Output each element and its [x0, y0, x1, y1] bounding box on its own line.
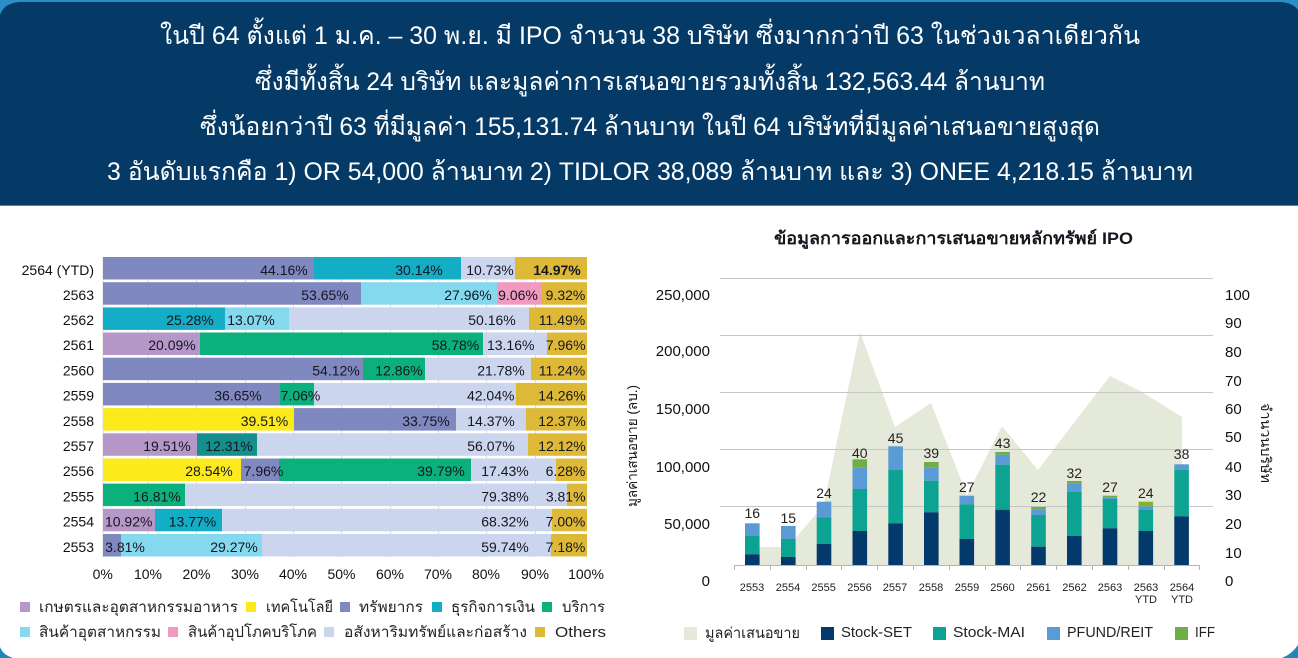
headline line 1: ในปี 64 ตั้งแต่ 1 ม.ค. – 30 พ.ย. มี IPO จำนวน 38 บริษัท ซึ่งมากกว่าปี 63 ในช่วงเวลาเดียวกัน [160, 17, 1140, 50]
right axis title: จำนวนบริษัท [1258, 403, 1274, 483]
stacked columns with company counts [745, 430, 1190, 565]
legend: Stock-MAI: Stock-MAI [953, 624, 1025, 641]
stacked bar chart: sector share by year [22, 257, 604, 582]
bar row 2554: 7.00% [546, 514, 585, 530]
bar row 2556: 2556 [63, 463, 94, 479]
right count axis: 20 [1225, 516, 1242, 533]
bar row 2557: 12.31% [205, 438, 253, 454]
legend: IFF [1175, 624, 1215, 641]
percent axis: 0% [93, 566, 113, 582]
category axis labels [740, 582, 1194, 606]
bar row 2559: 42.04% [467, 388, 514, 404]
bar row 2557: 12.12% [538, 438, 586, 454]
column 2563 YTD: 24 [1138, 485, 1154, 501]
percent axis: 60% [376, 566, 404, 582]
bar row 2558 [63, 408, 587, 431]
column 2553 [745, 505, 760, 565]
category axis labels: 2564 [1170, 582, 1194, 594]
bar row 2554: 2554 [63, 514, 94, 530]
right count axis: 0 [1225, 573, 1233, 590]
legend: PFUND/REIT: PFUND/REIT [1067, 624, 1153, 641]
bar row 2560: 12.86% [375, 362, 423, 378]
sector legend [20, 598, 606, 642]
corner accent: bottom left [0, 647, 13, 658]
bar row 2558: 39.51% [241, 413, 288, 429]
bar row 2564 (YTD): 14.97% [533, 262, 581, 278]
column 2560: 43 [995, 435, 1011, 451]
legend: offering value: มูลค่าเสนอขาย [705, 625, 800, 642]
column 2556: 40 [852, 445, 868, 461]
column 2555: 24 [816, 485, 832, 501]
column 2554: 15 [781, 510, 796, 526]
legend: consumer products: สินค้าอุปโภคบริโภค [188, 623, 317, 642]
bar row 2561: 7.96% [546, 337, 586, 353]
percent axis: 90% [521, 566, 549, 582]
bar row 2553: 3.81% [105, 539, 145, 555]
percent axis: 50% [327, 566, 356, 582]
bar row 2563: 9.06% [498, 287, 538, 303]
right count axis: 60 [1225, 401, 1242, 418]
bar row 2563: 27.96% [444, 287, 492, 303]
bar row 2563: 53.65% [301, 287, 349, 303]
bar row 2562 [63, 307, 587, 330]
percent axis: 100% [568, 566, 604, 582]
left axis title: มูลค่าเสนอขาย (ลบ.) [624, 385, 641, 507]
left value axis: 50,000 [664, 516, 710, 533]
percent axis: 80% [472, 566, 500, 582]
category axis labels: YTD [1171, 594, 1193, 606]
column 2563: 27 [1102, 479, 1118, 495]
bar row 2553: 29.27% [210, 539, 258, 555]
bar row 2564 (YTD): 44.16% [260, 262, 308, 278]
headline line 4: 3 อันดับแรกคือ 1) OR 54,000 ล้านบาท 2) TIDLOR 38,089 ล้านบาท และ 3) ONEE 4,218.15 ล้านบาท [107, 158, 1193, 186]
column 2554 [781, 510, 796, 565]
bar row 2556: 7.96% [244, 463, 283, 479]
left value axis [656, 287, 710, 590]
left value axis: 100,000 [656, 459, 710, 476]
combo chart legend [684, 624, 1215, 642]
bar row 2557: 56.07% [467, 438, 515, 454]
bar row 2553 [63, 534, 587, 556]
bar row 2553: 59.74% [481, 539, 529, 555]
percent axis: 40% [279, 566, 307, 582]
bar row 2553: 7.18% [546, 539, 585, 555]
right count axis: 80 [1225, 344, 1242, 361]
legend: property and construction: อสังหาริมทรัพย์และก่อสร้าง [344, 624, 527, 641]
column 2561: 22 [1031, 489, 1046, 505]
bar row 2564 (YTD): 30.14% [395, 262, 443, 278]
bar row 2563: 2563 [63, 287, 94, 303]
bar row 2559: 36.65% [214, 388, 262, 404]
left value axis: 200,000 [656, 343, 710, 360]
column 2558: 39 [924, 445, 939, 461]
legend: IFF: IFF [1195, 624, 1215, 641]
bar row 2560: 21.78% [477, 362, 525, 378]
bar row 2556: 28.54% [185, 463, 233, 479]
bar row 2561: 13.16% [487, 337, 534, 353]
column 2559 [959, 479, 975, 565]
bar row 2558: 12.37% [538, 413, 586, 429]
category axis labels: 2563 [1098, 582, 1122, 594]
category axis labels: 2562 [1062, 582, 1087, 594]
right count axis [1225, 287, 1250, 590]
bar row 2555: 16.81% [133, 488, 181, 504]
percent axis [93, 566, 604, 582]
bar row 2559 [63, 383, 587, 405]
legend: financials: ธุรกิจการเงิน [451, 599, 535, 617]
right count axis: 100 [1225, 287, 1250, 304]
bar row 2558: 14.37% [467, 413, 515, 429]
bar row 2561: 58.78% [432, 337, 479, 353]
right count axis: 90 [1225, 315, 1242, 332]
bar row 2562: 2562 [63, 312, 94, 328]
bar row 2555: 79.38% [481, 488, 529, 504]
column 2555 [816, 485, 832, 565]
bar row 2562: 50.16% [468, 312, 516, 328]
bar row 2558: 33.75% [402, 413, 450, 429]
bar row 2561: 2561 [63, 337, 94, 353]
column 2556 [852, 445, 868, 565]
bar row 2560: 54.12% [312, 362, 360, 378]
bar row 2564 (YTD): 10.73% [466, 262, 514, 278]
bar row 2557: 2557 [63, 438, 94, 454]
category axis labels: 2558 [919, 582, 943, 594]
area series: offering value [752, 332, 1182, 565]
bar row 2558: 2558 [63, 413, 94, 429]
bar row 2562: 11.49% [539, 312, 585, 328]
bar row 2559: 7.06% [281, 388, 320, 404]
column 2553: 16 [745, 505, 760, 521]
bar row 2556: 6.28% [546, 463, 585, 479]
column 2557: 45 [888, 430, 904, 446]
header panel [0, 0, 1298, 206]
category axis labels: 2554 [776, 582, 800, 594]
category axis labels: 2561 [1026, 582, 1051, 594]
legend: others: Others [555, 624, 606, 641]
column 2562 [1067, 465, 1082, 565]
bar row 2559: 14.26% [538, 388, 586, 404]
bar row 2560: 11.24% [539, 362, 585, 378]
bar row 2560: 2560 [63, 362, 94, 378]
bar row 2557: 19.51% [143, 438, 191, 454]
bar row 2564 (YTD) [22, 257, 587, 280]
bar row 2556: 39.79% [417, 463, 465, 479]
bar row 2555: 2555 [63, 488, 94, 504]
bar row 2561 [63, 332, 587, 355]
percent axis: 70% [424, 566, 452, 582]
category axis labels: 2560 [990, 582, 1015, 594]
bar row 2554: 68.32% [481, 514, 529, 530]
bar row 2554: 13.77% [169, 514, 216, 530]
column 2561 [1031, 489, 1046, 565]
headline line 2: ซึ่งมีทั้งสิ้น 24 บริษัท และมูลค่าการเสนอขายรวมทั้งสิ้น 132,563.44 ล้านบาท [255, 63, 1045, 97]
legend: Stock-SET: Stock-SET [841, 624, 912, 641]
legend: services: บริการ [562, 599, 605, 616]
category axis labels: 2559 [955, 582, 979, 594]
bar row 2556 [63, 458, 587, 481]
legend: others [535, 624, 606, 641]
bar row 2553: 2553 [63, 539, 94, 555]
legend: resources: ทรัพยากร [359, 599, 423, 616]
percent axis: 30% [231, 566, 259, 582]
right count axis: 70 [1225, 373, 1242, 390]
right count axis: 40 [1225, 459, 1242, 476]
bar row 2556: 17.43% [481, 463, 529, 479]
bar row 2559: 2559 [63, 388, 94, 404]
column 2559: 27 [959, 479, 975, 495]
percent axis: 10% [134, 566, 162, 582]
bar row 2562: 13.07% [227, 312, 275, 328]
column 2564 YTD: 38 [1174, 446, 1190, 462]
category axis labels: 2555 [811, 582, 836, 594]
column 2563 [1102, 479, 1118, 565]
bar row 2563: 9.32% [546, 287, 585, 303]
right count axis: 30 [1225, 487, 1242, 504]
column 2558 [924, 445, 939, 565]
column 2564 YTD [1174, 446, 1190, 565]
bar row 2557 [63, 433, 587, 456]
category axis labels: 2556 [847, 582, 872, 594]
bar row 2555 [63, 484, 587, 506]
category axis labels: 2563 [1134, 582, 1158, 594]
left value axis: 0 [702, 573, 710, 590]
bar row 2554: 10.92% [105, 514, 152, 530]
bar row 2564 (YTD): 2564 (YTD) [22, 262, 94, 278]
left value axis: 250,000 [656, 287, 710, 304]
bar row 2560 [63, 358, 587, 380]
category axis labels: 2557 [883, 582, 907, 594]
corner accent: bottom right [1282, 645, 1298, 658]
column 2557 [888, 430, 904, 565]
combo chart: IPO value and number of companies [624, 278, 1274, 606]
category axis labels: YTD [1135, 594, 1157, 606]
percent axis: 20% [182, 566, 211, 582]
legend: technology: เทคโนโลยี [266, 598, 333, 616]
bar row 2554 [63, 509, 587, 531]
legend: services [542, 599, 605, 616]
bar row 2555: 3.81% [546, 488, 586, 504]
headline line 3: ซึ่งน้อยกว่าปี 63 ที่มีมูลค่า 155,131.74 ล้านบาท ในปี 64 บริษัทที่มีมูลค่าเสนอขายสูงสุด [200, 109, 1100, 142]
column 2563 YTD [1138, 485, 1154, 565]
bar row 2563 [63, 282, 587, 305]
column 2562: 32 [1067, 465, 1082, 481]
bar row 2562: 25.28% [166, 312, 214, 328]
left value axis: 150,000 [656, 401, 710, 418]
right count axis: 10 [1225, 545, 1242, 562]
chart title: ข้อมูลการออกและการเสนอขายหลักทรัพย์ IPO [774, 228, 1133, 250]
category axis labels: 2553 [740, 582, 764, 594]
column 2560 [995, 435, 1011, 565]
bar row 2561: 20.09% [148, 337, 196, 353]
legend: agriculture: เกษตรและอุตสาหกรรมอาหาร [39, 599, 238, 617]
legend: industrials: สินค้าอุตสาหกรรม [39, 624, 161, 642]
right count axis: 50 [1225, 429, 1242, 446]
